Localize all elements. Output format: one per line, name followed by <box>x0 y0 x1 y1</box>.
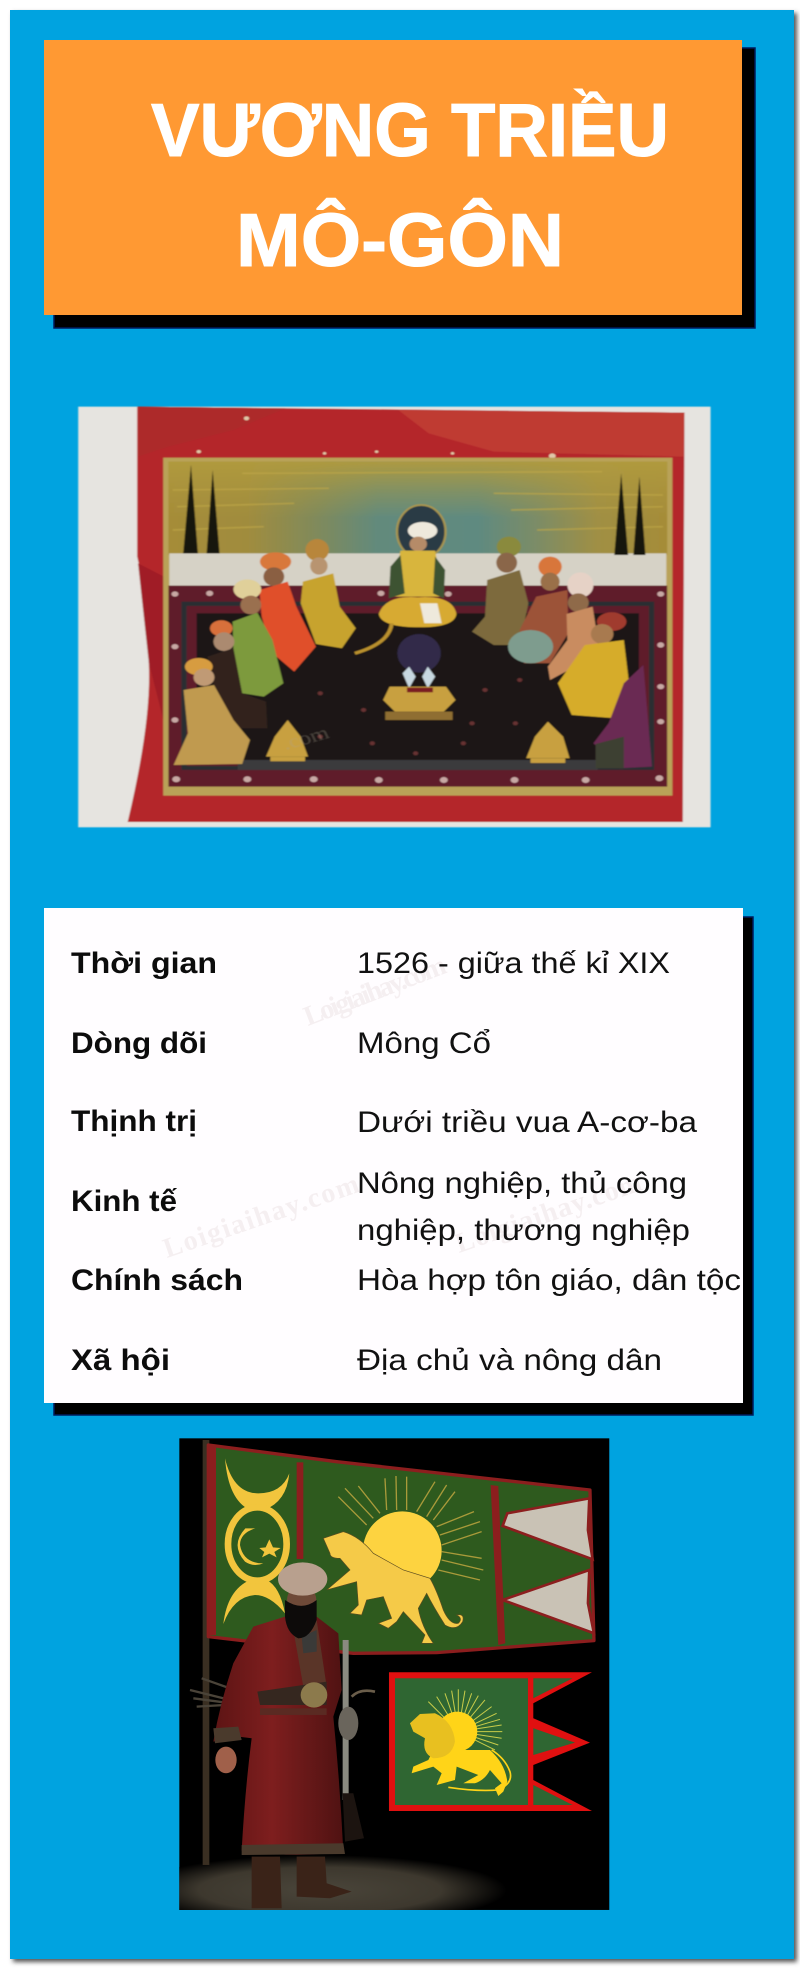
title banner <box>44 40 755 328</box>
row labels: Chính sách <box>71 1264 243 1297</box>
info table <box>44 908 753 1415</box>
watermarks: Loigiaihay.com <box>299 950 451 1033</box>
gold ornaments <box>266 720 570 763</box>
large banner <box>203 1440 594 1865</box>
row labels: Kinh tế <box>71 1185 177 1218</box>
row values: Địa chủ và nông dân <box>357 1344 662 1377</box>
row values: Nông nghiệp, thủ công <box>357 1167 687 1200</box>
faint watermark: .com <box>278 722 333 754</box>
row labels: Dòng dõi <box>71 1027 207 1060</box>
row labels: Thời gian <box>71 947 217 980</box>
right courtiers <box>472 537 652 768</box>
left courtiers <box>174 539 356 765</box>
row values: Dưới triều vua A-cơ-ba <box>357 1106 697 1139</box>
watermarks <box>159 950 646 1265</box>
row values: Hòa hợp tôn giáo, dân tộc <box>357 1264 741 1297</box>
sun and lion <box>363 1511 442 1590</box>
painting: Mughal court miniature <box>78 407 711 827</box>
title line 2: MÔ-GÔN <box>236 198 564 282</box>
row values: 1526 - giữa thế kỉ XIX <box>357 947 670 980</box>
image: Mughal soldier and flags <box>179 1438 610 1910</box>
watermarks: Loigiaihay.com <box>159 1169 363 1265</box>
wall <box>169 553 666 586</box>
row values <box>357 947 741 1377</box>
row labels: Xã hội <box>71 1344 170 1377</box>
crescent emblem <box>223 1458 289 1624</box>
row labels: Thịnh trị <box>71 1105 197 1138</box>
centre vases and table <box>383 634 456 720</box>
row labels <box>71 947 243 1377</box>
title line 1: VƯƠNG TRIỀU <box>151 88 669 172</box>
carpet <box>168 586 667 787</box>
small flag <box>389 1672 592 1811</box>
soldier <box>190 1562 375 1908</box>
watermarks: Loigiaihay.com <box>451 1167 646 1260</box>
row values: Mông Cổ <box>357 1027 491 1060</box>
row values: nghiệp, thương nghiệp <box>357 1214 690 1247</box>
trees <box>183 465 645 555</box>
central emperor <box>355 505 456 653</box>
